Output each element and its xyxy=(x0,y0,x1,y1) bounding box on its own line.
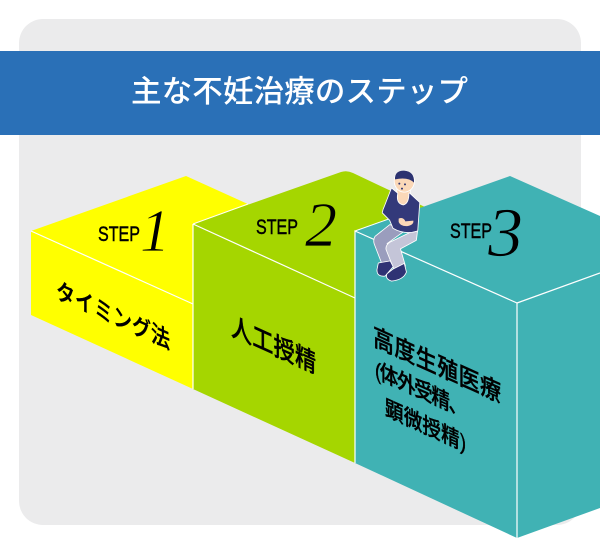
step 3 faces xyxy=(355,176,600,538)
head xyxy=(395,171,414,192)
step 2 block xyxy=(193,171,425,463)
face xyxy=(398,183,406,190)
step 2 label: 2 xyxy=(305,189,337,260)
step 3 label: STEP xyxy=(450,220,492,243)
step 2 label: STEP xyxy=(256,216,298,239)
step 3 name: (体外受精、 xyxy=(375,357,467,424)
hands xyxy=(399,218,413,226)
step 3 block xyxy=(355,176,600,538)
shoes xyxy=(377,261,393,276)
step 3 name xyxy=(373,323,501,457)
step 3 label xyxy=(450,195,523,272)
step 3 name: 顕微授精) xyxy=(385,395,466,457)
step 2 label xyxy=(256,189,337,260)
step 3 label: 3 xyxy=(487,195,523,272)
icon: person sitting on step 3 holding stomach xyxy=(374,171,419,281)
step 2 faces xyxy=(193,171,425,463)
front leg xyxy=(386,229,417,270)
title: 主な不妊治療のステップ xyxy=(131,75,468,109)
torso xyxy=(383,189,419,232)
back leg xyxy=(374,225,403,265)
neck xyxy=(397,189,410,205)
step 2 name: 人工授精 xyxy=(231,312,316,380)
step 1 name: タイミング法 xyxy=(56,277,170,355)
step 1 label: 1 xyxy=(140,198,170,264)
step 1 label xyxy=(98,198,170,264)
step 1 faces xyxy=(31,176,250,389)
title banner xyxy=(0,51,600,135)
step 3 name: 高度生殖医療 xyxy=(373,323,501,409)
hair xyxy=(395,171,414,183)
step 1 block xyxy=(31,176,250,389)
step 1 label: STEP xyxy=(98,223,140,246)
